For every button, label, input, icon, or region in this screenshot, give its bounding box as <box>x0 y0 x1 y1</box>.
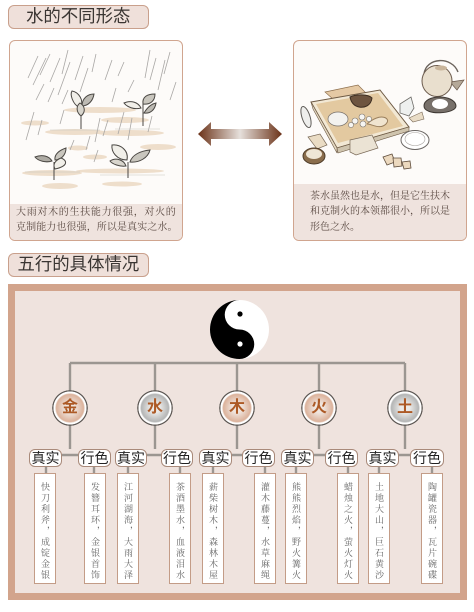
pill: wood form: 行色 <box>244 450 272 466</box>
heading: water forms <box>8 5 149 29</box>
caption: tea water <box>294 184 466 240</box>
strip: metal real <box>34 473 56 584</box>
strip: fire form <box>337 473 359 584</box>
panel: heavy rain <box>9 40 183 241</box>
pill: fire form: 行色 <box>328 450 356 466</box>
strip: water real: 江河湖海，大雨大泽 <box>123 482 133 581</box>
pill: fire real: 真实 <box>284 450 312 466</box>
heading: five elements: 五行的具体情况 <box>18 254 139 274</box>
strip: metal form: 发簪耳环，金银首饰 <box>90 482 100 581</box>
top tray <box>324 84 366 100</box>
strip: water form <box>169 473 191 584</box>
caption: tea water: 和克制火的本领都很小，所以是 <box>310 206 450 217</box>
element: earth: 土 <box>397 399 413 416</box>
strip: water real <box>117 473 139 584</box>
pill: earth real: 真实 <box>368 450 396 466</box>
caption: heavy rain: 大雨对木的生扶能力很强，对火的 <box>16 207 176 218</box>
pill: water form: 行色 <box>163 450 191 466</box>
strip: wood form: 灌木藤蔓，水草麻绳 <box>260 482 270 581</box>
element: water: 水 <box>147 399 163 416</box>
caption: heavy rain: 克制能力也很强，所以是真实之水。 <box>16 222 178 233</box>
panel: five elements frame <box>8 284 467 600</box>
element: earth <box>387 390 423 426</box>
pill: metal real: 真实 <box>32 450 60 466</box>
teapot and cups <box>328 112 348 126</box>
pill: wood real: 真实 <box>202 450 230 466</box>
pill: water real: 真实 <box>117 450 145 466</box>
strip: fire real <box>285 473 307 584</box>
element: metal: 金 <box>62 399 78 416</box>
plant 3 <box>34 148 66 180</box>
arrow: double-headed <box>198 122 282 146</box>
plant 4 <box>110 144 150 178</box>
panel: tea water <box>293 40 467 241</box>
strip: earth form: 陶罐瓷器，瓦片碗碟 <box>427 482 437 581</box>
strip: metal real: 快刀利斧，成锭金银 <box>40 482 50 581</box>
plant 1 <box>71 90 94 128</box>
table <box>310 90 408 148</box>
side items <box>400 96 414 116</box>
strip: water form: 茶酒墨水，血液泪水 <box>175 482 185 581</box>
strip: metal form <box>84 473 106 584</box>
pill: earth form: 行色 <box>413 450 441 466</box>
icon: yin-yang <box>210 300 269 359</box>
caption: heavy rain <box>10 204 182 240</box>
strip: earth form <box>421 473 443 584</box>
strip: earth real <box>368 473 390 584</box>
element: fire <box>301 390 337 426</box>
strip: wood real <box>202 473 224 584</box>
tree connectors <box>44 362 434 473</box>
strip: earth real: 土地大山，巨石黄沙 <box>374 482 384 581</box>
strip: fire form: 蜡烛之火，萤火灯火 <box>343 482 353 581</box>
kettle <box>422 60 464 112</box>
caption: tea water: 形色之水。 <box>310 222 360 233</box>
strip: fire real: 熊熊烈焰，野火篝火 <box>291 482 301 581</box>
element: fire: 火 <box>311 399 327 416</box>
element: water <box>137 390 173 426</box>
illustration: seedlings in rain <box>21 50 176 189</box>
element: wood: 木 <box>229 399 245 416</box>
strip: wood form <box>254 473 276 584</box>
illustration: tea table <box>300 60 465 170</box>
dark bowl <box>350 94 372 107</box>
heading: water forms: 水的不同形态 <box>26 6 130 26</box>
element: metal <box>52 390 88 426</box>
strip: wood real: 薪柴树木，森林木屋 <box>208 482 218 581</box>
pill: metal form: 行色 <box>80 450 108 466</box>
plant 2 <box>124 94 156 126</box>
element: wood <box>219 390 255 426</box>
caption: tea water: 茶水虽然也是水，但是它生扶木 <box>310 191 450 202</box>
